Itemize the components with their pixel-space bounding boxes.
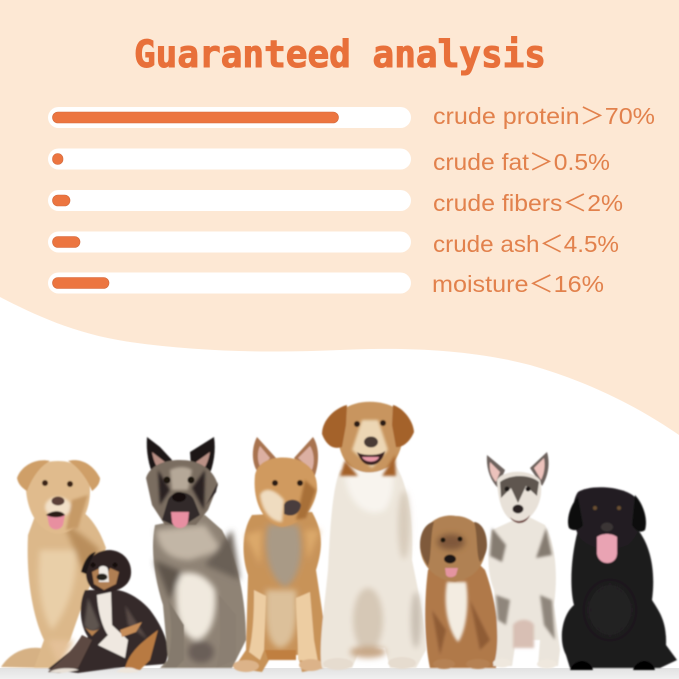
peach background wave [0, 0, 679, 435]
bar: crude protein [48, 107, 411, 128]
title: Guaranteed analysis [134, 33, 546, 76]
dog: tricolour puppy [48, 550, 168, 673]
label: crude fibers: crude fibers＜2% [433, 190, 623, 216]
label: moisture: moisture＜16% [432, 271, 604, 297]
label: crude ash: crude ash＜4.5% [433, 231, 619, 257]
group of dogs [1, 402, 677, 673]
dog: black labrador [562, 487, 677, 670]
dog: golden retriever [1, 460, 106, 668]
bar: crude fibers [48, 190, 411, 211]
bar: crude fat [48, 148, 411, 170]
dog: brown fluffy dog [420, 516, 498, 669]
dog: tan shepherd [233, 437, 325, 672]
floor [0, 668, 679, 679]
dog: grey shepherd [146, 437, 246, 668]
bar chart: guaranteed analysis [48, 107, 411, 294]
label: crude protein: crude protein＞70% [433, 103, 655, 129]
label: crude fat: crude fat＞0.5% [433, 149, 610, 175]
bar: moisture [48, 272, 411, 294]
dog: merle husky [487, 452, 560, 668]
bar: crude ash [48, 232, 411, 252]
dog: large tan and white dog [321, 402, 426, 670]
